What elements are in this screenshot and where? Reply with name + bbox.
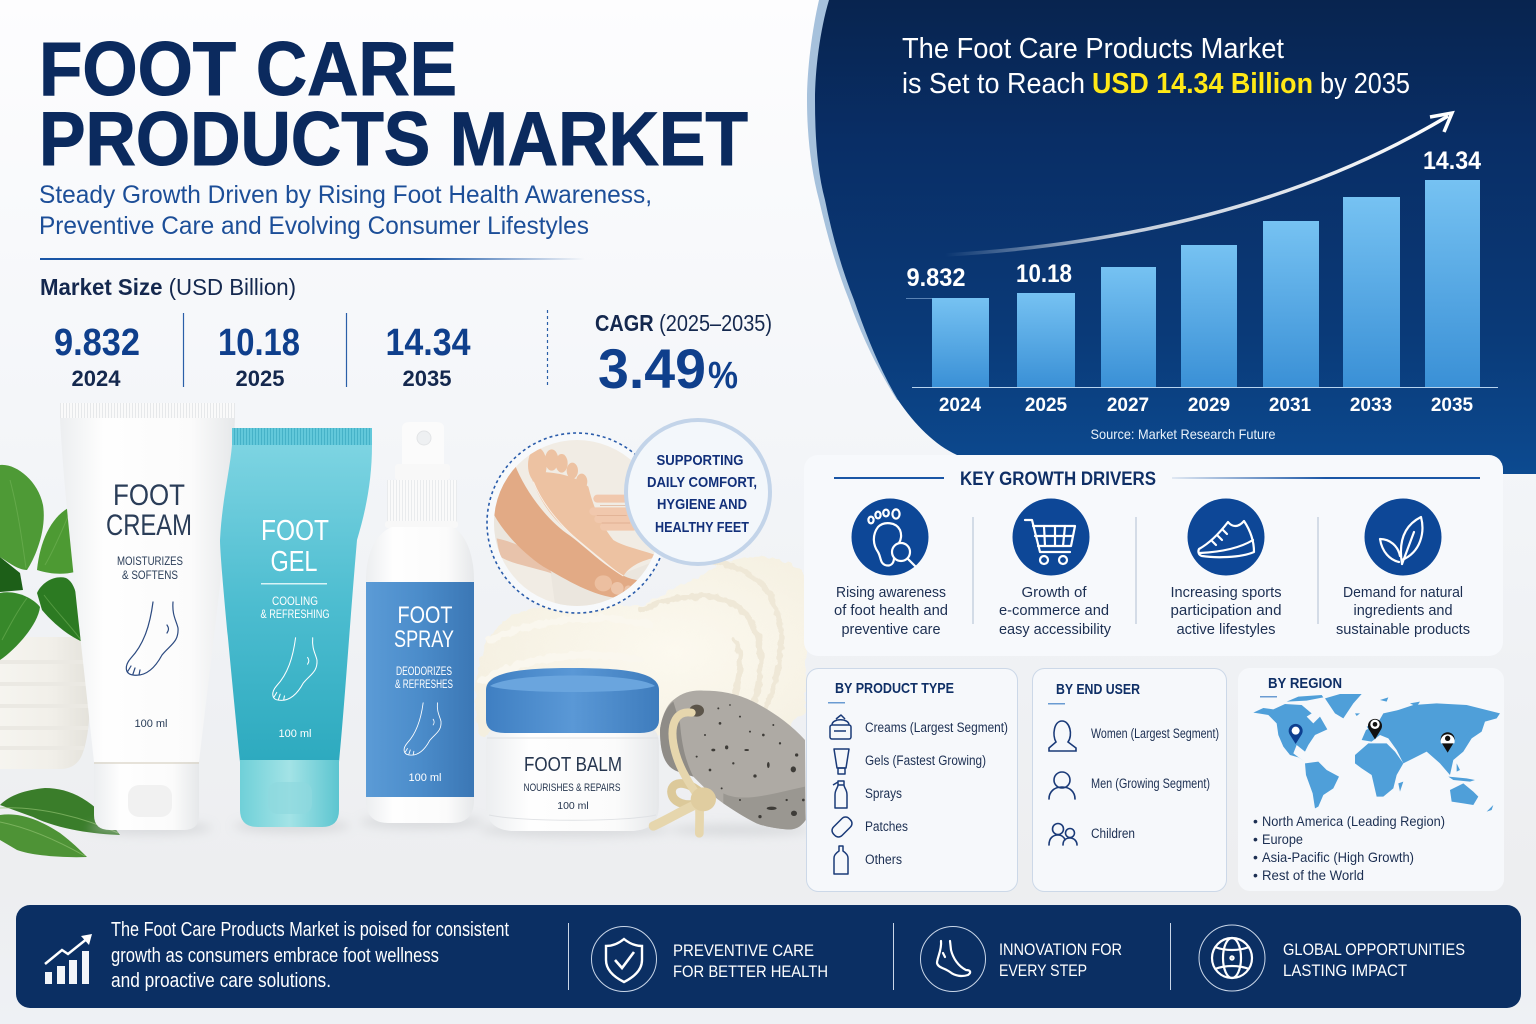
bar chart: 14.34 (1423, 147, 1481, 175)
region list: Asia-Pacific (High Growth) (1262, 849, 1414, 865)
stat 2035 (386, 322, 470, 391)
footer text: preventive care: FOR BETTER HEALTH (673, 962, 828, 981)
driver: foot awareness (852, 498, 928, 576)
stat 2024 (54, 322, 140, 391)
product type list: Gels (Fastest Growing) (865, 753, 986, 768)
product: foot gel tube: FOOT (261, 515, 329, 547)
bar chart: 2029 (1188, 395, 1230, 416)
table shadows (88, 815, 810, 837)
leaves on table (0, 788, 120, 857)
product: foot balm jar: 100 ml (557, 800, 589, 812)
product: foot cream tube: MOISTURIZES (117, 554, 183, 568)
product type list (865, 720, 1008, 867)
CAGR stat: CAGR (2025–2035) (595, 310, 772, 336)
stat 2025 (218, 322, 300, 391)
product: foot gel tube: & REFRESHING (260, 607, 330, 621)
driver captions: active lifestyles (1176, 621, 1276, 638)
stat 2035: 14.34 (386, 322, 470, 364)
footer text: innovation: INNOVATION FOR (999, 940, 1122, 959)
callout: supporting daily comfort: HYGIENE AND (657, 496, 747, 513)
navy chart panel (807, 0, 1536, 474)
product: foot cream tube: FOOT (113, 479, 185, 512)
map pins (1289, 719, 1455, 753)
panel: key growth drivers (804, 455, 1503, 656)
plant with pot (0, 465, 90, 769)
bar chart: 10.18 (1016, 260, 1072, 288)
title: PRODUCTS MARKET (39, 97, 748, 182)
product: foot cream tube (60, 403, 235, 830)
CAGR stat (595, 310, 772, 400)
subtitle: Preventive Care and Evolving Consumer Lifestyles (39, 212, 589, 240)
driver: natural leaf (1364, 498, 1442, 576)
footer text: preventive care: PREVENTIVE CARE (673, 941, 814, 960)
footer text: global opportunities (1283, 940, 1465, 980)
product: foot cream tube: & SOFTENS (122, 568, 178, 582)
chart headline (902, 33, 1410, 100)
region list (1253, 813, 1445, 883)
chart headline: is Set to Reach (902, 68, 1085, 100)
driver: e-commerce cart (1012, 498, 1090, 576)
CAGR stat: 3.49 (598, 337, 706, 400)
icon: growth chart (45, 934, 92, 984)
product: foot spray bottle (366, 422, 474, 823)
footer text: global opportunities: LASTING IMPACT (1283, 961, 1407, 980)
chart headline: by 2035 (1320, 68, 1410, 100)
product type list: Sprays (865, 786, 902, 801)
driver captions: Rising awareness (836, 584, 946, 601)
driver captions: of foot health and (834, 602, 948, 619)
towel (475, 557, 806, 745)
callout: supporting daily comfort (626, 420, 770, 564)
region list: • (1253, 813, 1258, 829)
product: foot spray bottle: FOOT (398, 602, 453, 629)
end user icons (1049, 721, 1077, 845)
footer text: preventive care (673, 941, 828, 981)
panel: by region: BY REGION (1268, 675, 1342, 692)
region list: • (1253, 867, 1258, 883)
icon: shield (592, 926, 656, 992)
footer band (16, 905, 1521, 1008)
footer statement (111, 919, 509, 992)
product: foot spray bottle: SPRAY (394, 626, 454, 653)
bar chart: 2024 (939, 395, 982, 416)
icon: foot (920, 926, 986, 992)
circular foot photo (487, 433, 667, 617)
driver captions: ingredients and (1354, 602, 1452, 619)
footer text: innovation (999, 940, 1122, 980)
panel: by end user (1032, 668, 1226, 892)
footer text: global opportunities: GLOBAL OPPORTUNITIES (1283, 940, 1465, 959)
product: foot balm jar: NOURISHES & REPAIRS (524, 782, 620, 794)
title: FOOT CARE (39, 27, 457, 112)
callout: supporting daily comfort: DAILY COMFORT, (647, 474, 757, 491)
driver captions: preventive care (842, 621, 940, 638)
product: foot spray bottle: 100 ml (408, 772, 442, 784)
panel: by product type (806, 668, 1018, 892)
bar chart: 2033 (1350, 395, 1392, 416)
product: foot gel tube: COOLING (272, 594, 318, 608)
stat 2025: 10.18 (218, 322, 300, 364)
icon: globe (1199, 925, 1265, 991)
footer text: innovation: EVERY STEP (999, 961, 1087, 980)
key drivers heading: KEY GROWTH DRIVERS (960, 469, 1156, 490)
product: foot cream tube: 100 ml (134, 718, 168, 730)
title (39, 27, 748, 182)
product: foot gel tube: GEL (270, 546, 318, 578)
product: foot cream tube: CREAM (106, 509, 192, 542)
region list: • (1253, 831, 1258, 847)
footer statement: and proactive care solutions. (111, 970, 331, 992)
end user list (1091, 726, 1219, 841)
driver captions: easy accessibility (999, 621, 1111, 638)
region list: • (1253, 849, 1258, 865)
driver captions: Demand for natural (1343, 584, 1463, 601)
stat 2035: 2035 (403, 366, 451, 391)
market size heading: Market Size (USD Billion) (40, 274, 296, 300)
region list: North America (Leading Region) (1262, 813, 1445, 829)
footer statement: growth as consumers embrace foot wellness (111, 945, 439, 967)
product: foot gel tube: 100 ml (278, 728, 312, 740)
pumice stone (653, 691, 806, 833)
bar chart: 2025 (1025, 395, 1068, 416)
driver captions: participation and (1170, 602, 1282, 619)
region list: Rest of the World (1262, 867, 1364, 883)
product: foot gel tube (220, 428, 372, 827)
bar chart: 2035 (1431, 395, 1474, 416)
callout: supporting daily comfort: HEALTHY FEET (655, 519, 749, 536)
product type list: Others (865, 852, 902, 867)
bar chart: 2031 (1269, 395, 1312, 416)
footer statement: The Foot Care Products Market is poised for consistent (111, 919, 509, 941)
product: foot balm jar (486, 668, 659, 831)
product type icons (830, 715, 854, 874)
driver captions: Growth of (1022, 584, 1087, 601)
panel: by region (1238, 668, 1504, 891)
stat 2024: 2024 (72, 366, 121, 391)
product: foot spray bottle: DEODORIZES (396, 666, 452, 678)
callout: supporting daily comfort: SUPPORTING (656, 452, 744, 469)
chart headline: The Foot Care Products Market (902, 33, 1284, 65)
stat 2025: 2025 (236, 366, 284, 391)
bar chart: 2027 (1107, 395, 1149, 416)
driver captions (834, 584, 1470, 638)
region list: Europe (1262, 831, 1303, 847)
bar chart (906, 147, 1498, 416)
growth arrow (945, 113, 1452, 255)
driver captions: Increasing sports (1170, 584, 1282, 601)
product: foot spray bottle: & REFRESHES (395, 679, 453, 691)
market size stats (40, 274, 772, 400)
driver captions: e-commerce and (999, 602, 1109, 619)
end user list: Women (Largest Segment) (1091, 726, 1219, 741)
world map (1253, 694, 1500, 812)
stat 2024: 9.832 (54, 322, 140, 364)
product type list: Patches (865, 819, 908, 834)
end user list: Men (Growing Segment) (1091, 776, 1210, 791)
driver captions: sustainable products (1336, 621, 1470, 638)
panel: by end user: BY END USER (1056, 681, 1140, 698)
bar chart: 9.832 (906, 264, 966, 292)
CAGR stat: % (708, 355, 738, 397)
driver: sports shoe (1188, 498, 1264, 576)
panel: by product type: BY PRODUCT TYPE (835, 680, 954, 697)
product type list: Creams (Largest Segment) (865, 720, 1008, 735)
subtitle (39, 181, 652, 240)
product: foot balm jar: FOOT BALM (524, 754, 622, 776)
chart headline: USD 14.34 Billion (1092, 68, 1313, 100)
source note: Source: Market Research Future (1090, 426, 1276, 442)
end user list: Children (1091, 826, 1135, 841)
subtitle: Steady Growth Driven by Rising Foot Health Awareness, (39, 181, 652, 209)
